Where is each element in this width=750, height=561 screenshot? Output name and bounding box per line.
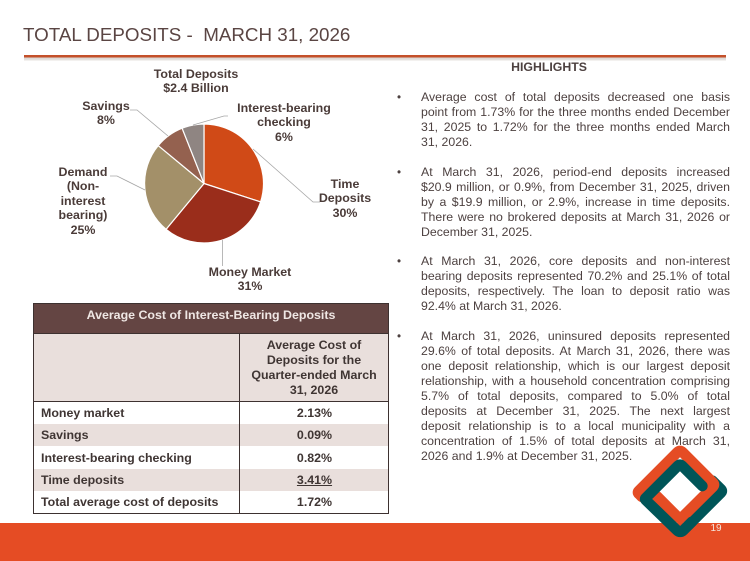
highlight 4: 2026 and 1.9% at December 31, 2025. xyxy=(421,449,632,463)
label: interest-bearing checking xyxy=(237,101,331,144)
row: time deposits xyxy=(41,473,332,487)
slice: demand xyxy=(145,146,204,229)
column divider xyxy=(239,334,240,514)
highlight 4: At March 31, 2026, uninsured deposits represented xyxy=(421,329,730,343)
pie chart xyxy=(110,110,320,266)
highlight 2: by a $19.9 million, or 2.9%, increase in time deposits. xyxy=(421,195,730,209)
row: money market xyxy=(41,406,332,420)
highlight 4: one deposit relationship, which is our largest deposit xyxy=(421,359,730,373)
row: time deposits: 3.41% xyxy=(297,473,332,487)
highlight 3: bearing deposits represented 70.2% and 25.1% of total xyxy=(421,269,730,283)
column heading: 31, 2026 xyxy=(290,383,338,397)
page number: 19 xyxy=(710,523,722,534)
row: total average cost xyxy=(41,495,332,509)
label: savings xyxy=(82,99,130,127)
highlight 1: Average cost of total deposits decreased one basis xyxy=(421,90,730,104)
row: money market: Money market xyxy=(41,406,124,420)
label: total deposits: $2.4 Billion xyxy=(163,81,229,95)
label: interest-bearing checking: checking xyxy=(257,115,311,129)
highlight 3: At March 31, 2026, core deposits and non-interest xyxy=(421,254,730,268)
bullet marker 4: • xyxy=(397,330,401,343)
row: interest-bearing checking xyxy=(41,451,332,465)
slice: time deposits xyxy=(204,124,264,202)
row: time deposits: Time deposits xyxy=(41,473,124,487)
icon: logo xyxy=(632,446,728,538)
label: money market: Money Market xyxy=(209,265,291,279)
row: time deposits band xyxy=(34,468,388,491)
highlight 4 xyxy=(421,329,730,463)
label: demand: bearing) xyxy=(59,208,107,222)
label: time deposits: 30% xyxy=(333,206,357,220)
highlights heading: HIGHLIGHTS xyxy=(511,60,587,74)
label: time deposits: Time xyxy=(331,177,359,191)
label: demand: (Non- xyxy=(67,179,99,193)
label: savings: 8% xyxy=(97,113,115,127)
bullet marker 3: • xyxy=(397,255,401,268)
row: savings band xyxy=(34,424,388,446)
row: interest-bearing checking: Interest-bearing checking xyxy=(41,451,192,465)
highlight 4: concentration of 1.5% of total deposits at March 31, xyxy=(421,434,730,448)
label: demand: Demand xyxy=(59,165,107,179)
leader lines xyxy=(110,110,320,266)
table: average cost of interest-bearing deposits xyxy=(33,303,389,514)
slice: money market xyxy=(166,184,261,243)
table title bar: Average Cost of Interest-Bearing Deposits xyxy=(87,308,335,322)
slice: savings xyxy=(158,128,204,184)
highlight 4: deposits at December 31, 2025. The next largest xyxy=(421,404,730,418)
label: money market xyxy=(209,265,292,293)
highlight 3 xyxy=(421,254,730,313)
highlight 4: deposit relationship is to a local municipality with a xyxy=(421,419,730,433)
label: demand: interest xyxy=(61,194,105,208)
highlight 2: $20.9 million, or 0.9%, from December 31, 2025, driven xyxy=(421,180,730,194)
bullet marker 1: • xyxy=(397,91,401,104)
bullet marker 2: • xyxy=(397,166,401,179)
title rule xyxy=(24,55,726,61)
highlight 4: 5.7% of total deposits, compared to 5.0% of total xyxy=(421,389,730,403)
highlight 2 xyxy=(421,165,730,239)
label: total deposits xyxy=(154,67,238,95)
highlight 1: 31, 2025 to 1.72% for the three months ended March xyxy=(421,120,730,134)
highlight 3: deposits, respectively. The loan to deposit ratio was xyxy=(421,284,730,298)
label: demand: 25% xyxy=(71,223,95,237)
row: money market: 2.13% xyxy=(297,406,332,420)
row: savings xyxy=(41,428,332,442)
column heading: Average Cost of xyxy=(267,338,361,352)
label: interest-bearing checking: Interest-bearing xyxy=(237,101,331,115)
label: time deposits: Deposits xyxy=(319,191,371,205)
column heading xyxy=(251,338,377,397)
highlight 1: 31, 2026. xyxy=(421,135,472,149)
row: savings: Savings xyxy=(41,428,89,442)
label: demand xyxy=(59,165,107,237)
highlight 4: 29.6% of total deposits. At March 31, 2026, there was xyxy=(421,344,730,358)
highlight 1 xyxy=(421,90,730,149)
label: interest-bearing checking: 6% xyxy=(275,130,293,144)
highlight 1: point from 1.73% for the three months ended December xyxy=(421,105,730,119)
highlight 2: At March 31, 2026, period-end deposits increased xyxy=(421,165,730,179)
table header row xyxy=(34,334,388,402)
row: interest-bearing checking: 0.82% xyxy=(297,451,332,465)
highlight 3: 92.4% at March 31, 2026. xyxy=(421,299,562,313)
row: total average cost: 1.72% xyxy=(297,495,332,509)
footer band xyxy=(0,523,750,561)
label: money market: 31% xyxy=(238,279,262,293)
column heading: Deposits for the xyxy=(267,353,361,367)
slice: interest-bearing checking xyxy=(182,124,204,184)
highlight 2: December 31, 2025. xyxy=(421,225,532,239)
highlight 2: There were no brokered deposits at March 31, 2026 or xyxy=(421,210,730,224)
row: savings: 0.09% xyxy=(297,428,332,442)
highlight 4: relationship, with a household concentration comprising xyxy=(421,374,730,388)
column heading: Quarter-ended March xyxy=(251,368,377,382)
label: total deposits: Total Deposits xyxy=(154,67,238,81)
label: savings: Savings xyxy=(82,99,130,113)
table title bar xyxy=(34,304,388,334)
row: total average cost: Total average cost of deposits xyxy=(41,495,218,509)
title: TOTAL DEPOSITS - MARCH 31, 2026 xyxy=(23,24,350,45)
label: time deposits xyxy=(319,177,371,220)
